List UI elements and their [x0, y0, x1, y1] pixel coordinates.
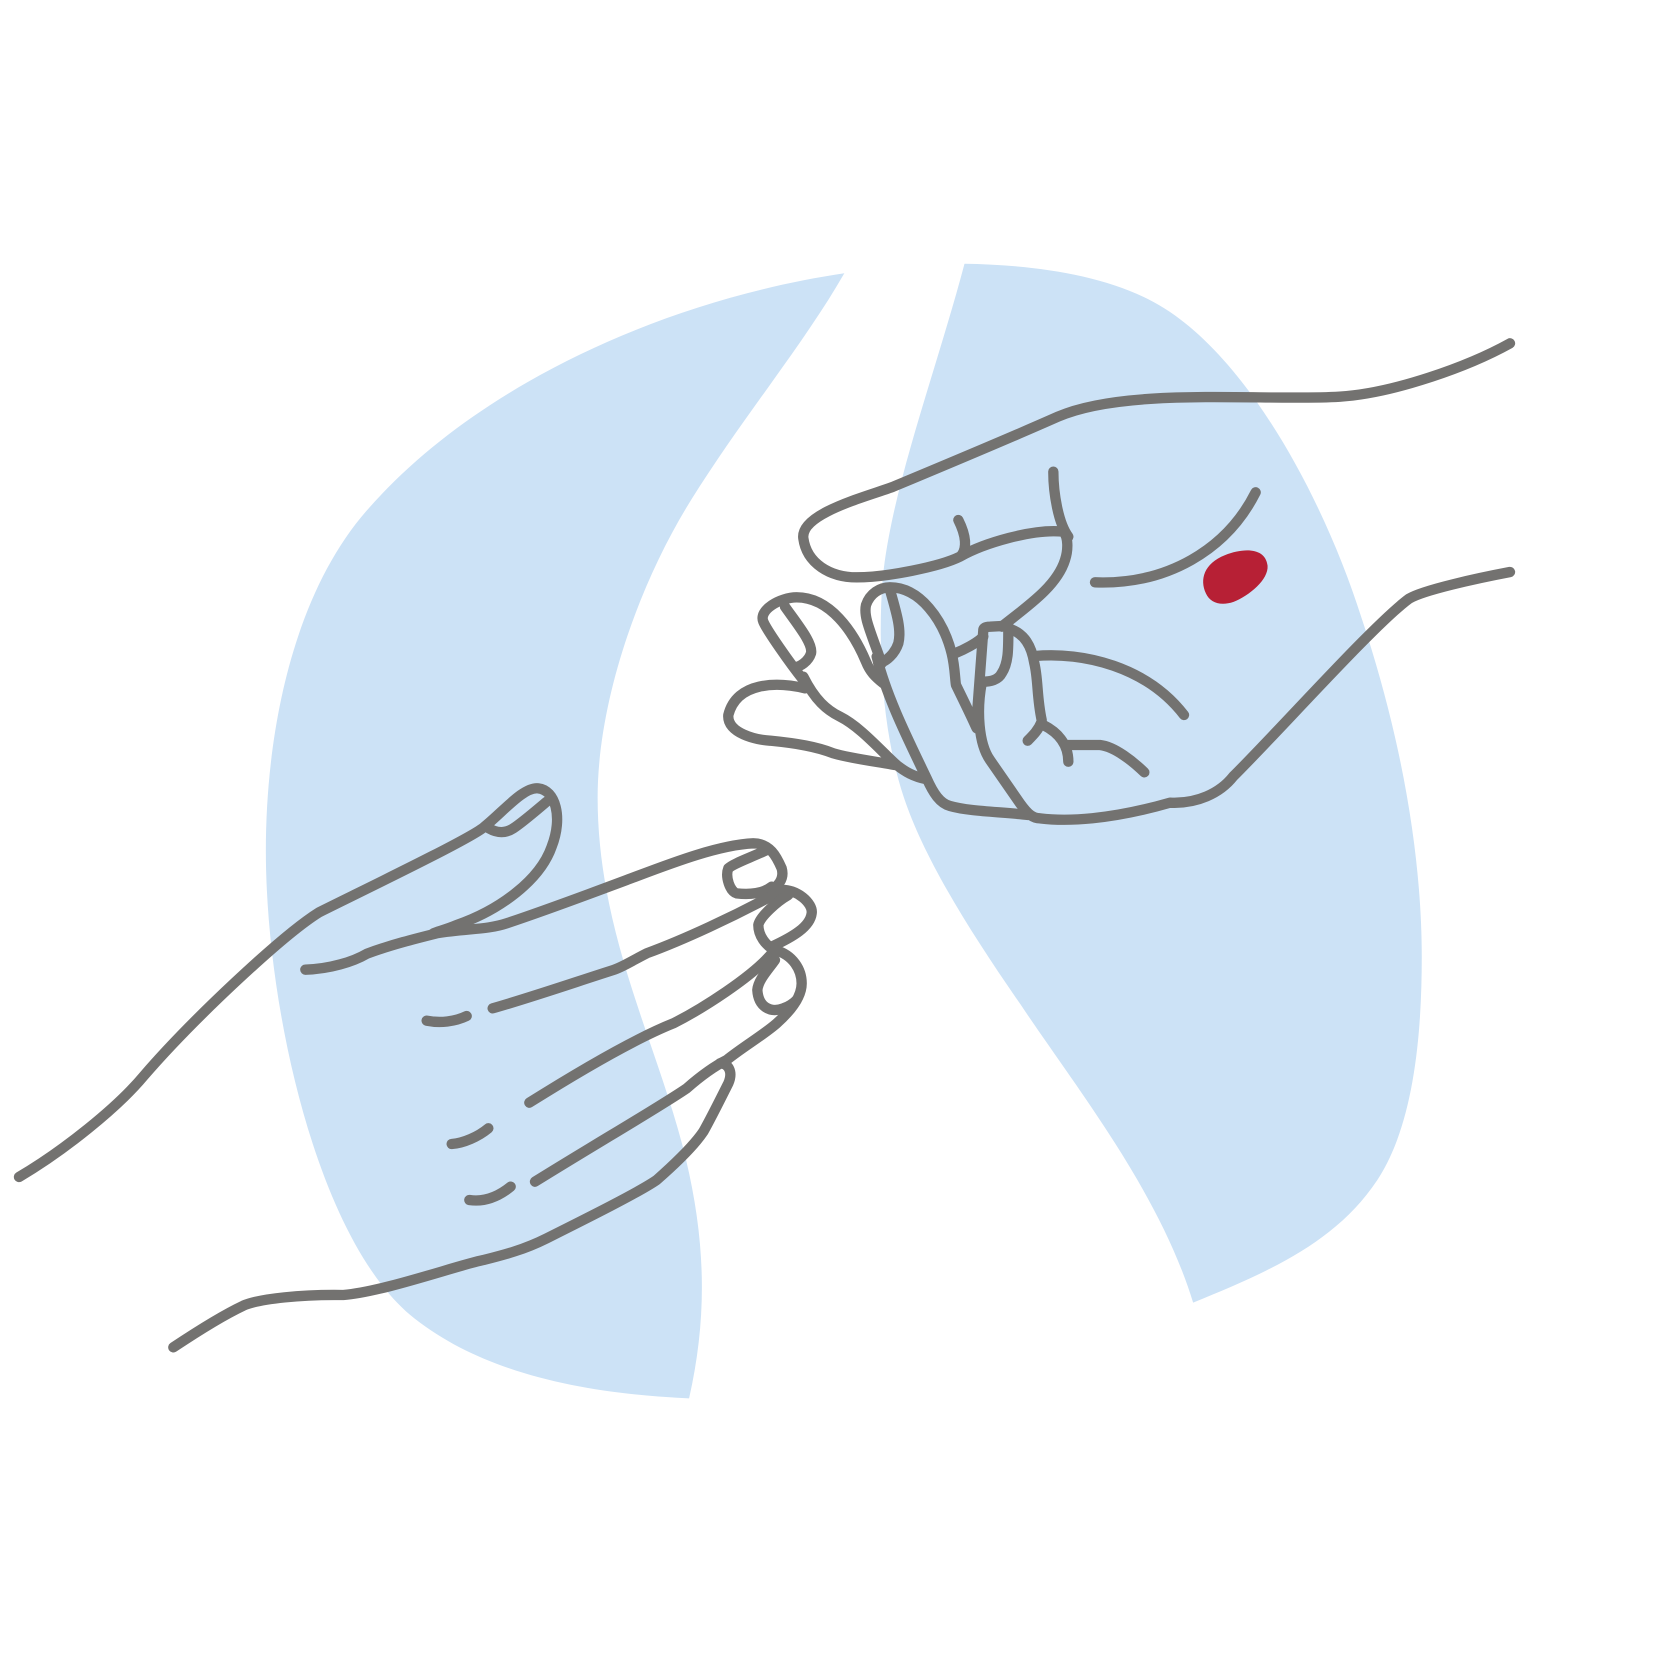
- index finger outer line: [803, 343, 1510, 627]
- wrist crease: [1053, 472, 1068, 537]
- left finger nail: [785, 607, 811, 667]
- right blue background shape: [881, 264, 1422, 1303]
- thumb base curve: [1043, 725, 1068, 762]
- second finger front edge: [877, 657, 1028, 815]
- little finger and hand edge: [173, 1063, 730, 1347]
- thumb outer line: [19, 788, 557, 1177]
- palm lower edge and arm: [979, 572, 1510, 820]
- thumb base line: [1065, 745, 1144, 772]
- index under line: [493, 893, 777, 1008]
- third finger nail: [977, 626, 1008, 710]
- index nail: [727, 850, 772, 894]
- red dot: [1203, 550, 1268, 604]
- thumb nail: [486, 802, 547, 832]
- middle under line: [529, 952, 773, 1103]
- ring nail: [757, 960, 797, 1010]
- lower hand: [19, 788, 812, 1347]
- index finger top line: [305, 843, 782, 970]
- palm arc: [1095, 492, 1256, 582]
- third finger outline: [1008, 628, 1042, 720]
- middle nail: [758, 895, 788, 948]
- crease dash one: [427, 1016, 467, 1022]
- second finger nail: [878, 590, 899, 663]
- upper hand: [728, 343, 1510, 820]
- left blue background shape: [266, 273, 844, 1398]
- knuckle tick: [958, 520, 965, 555]
- left finger outline: [763, 597, 883, 683]
- palm arc lower: [1035, 655, 1184, 715]
- lowest finger: [728, 685, 895, 765]
- finger web: [955, 637, 983, 653]
- crease dash three: [469, 1187, 511, 1201]
- left finger lower line: [803, 677, 927, 779]
- small tick: [1028, 722, 1042, 741]
- crease dash two: [452, 1128, 488, 1144]
- ring finger: [535, 950, 802, 1182]
- middle finger tip: [772, 890, 812, 947]
- second finger outline: [865, 587, 977, 728]
